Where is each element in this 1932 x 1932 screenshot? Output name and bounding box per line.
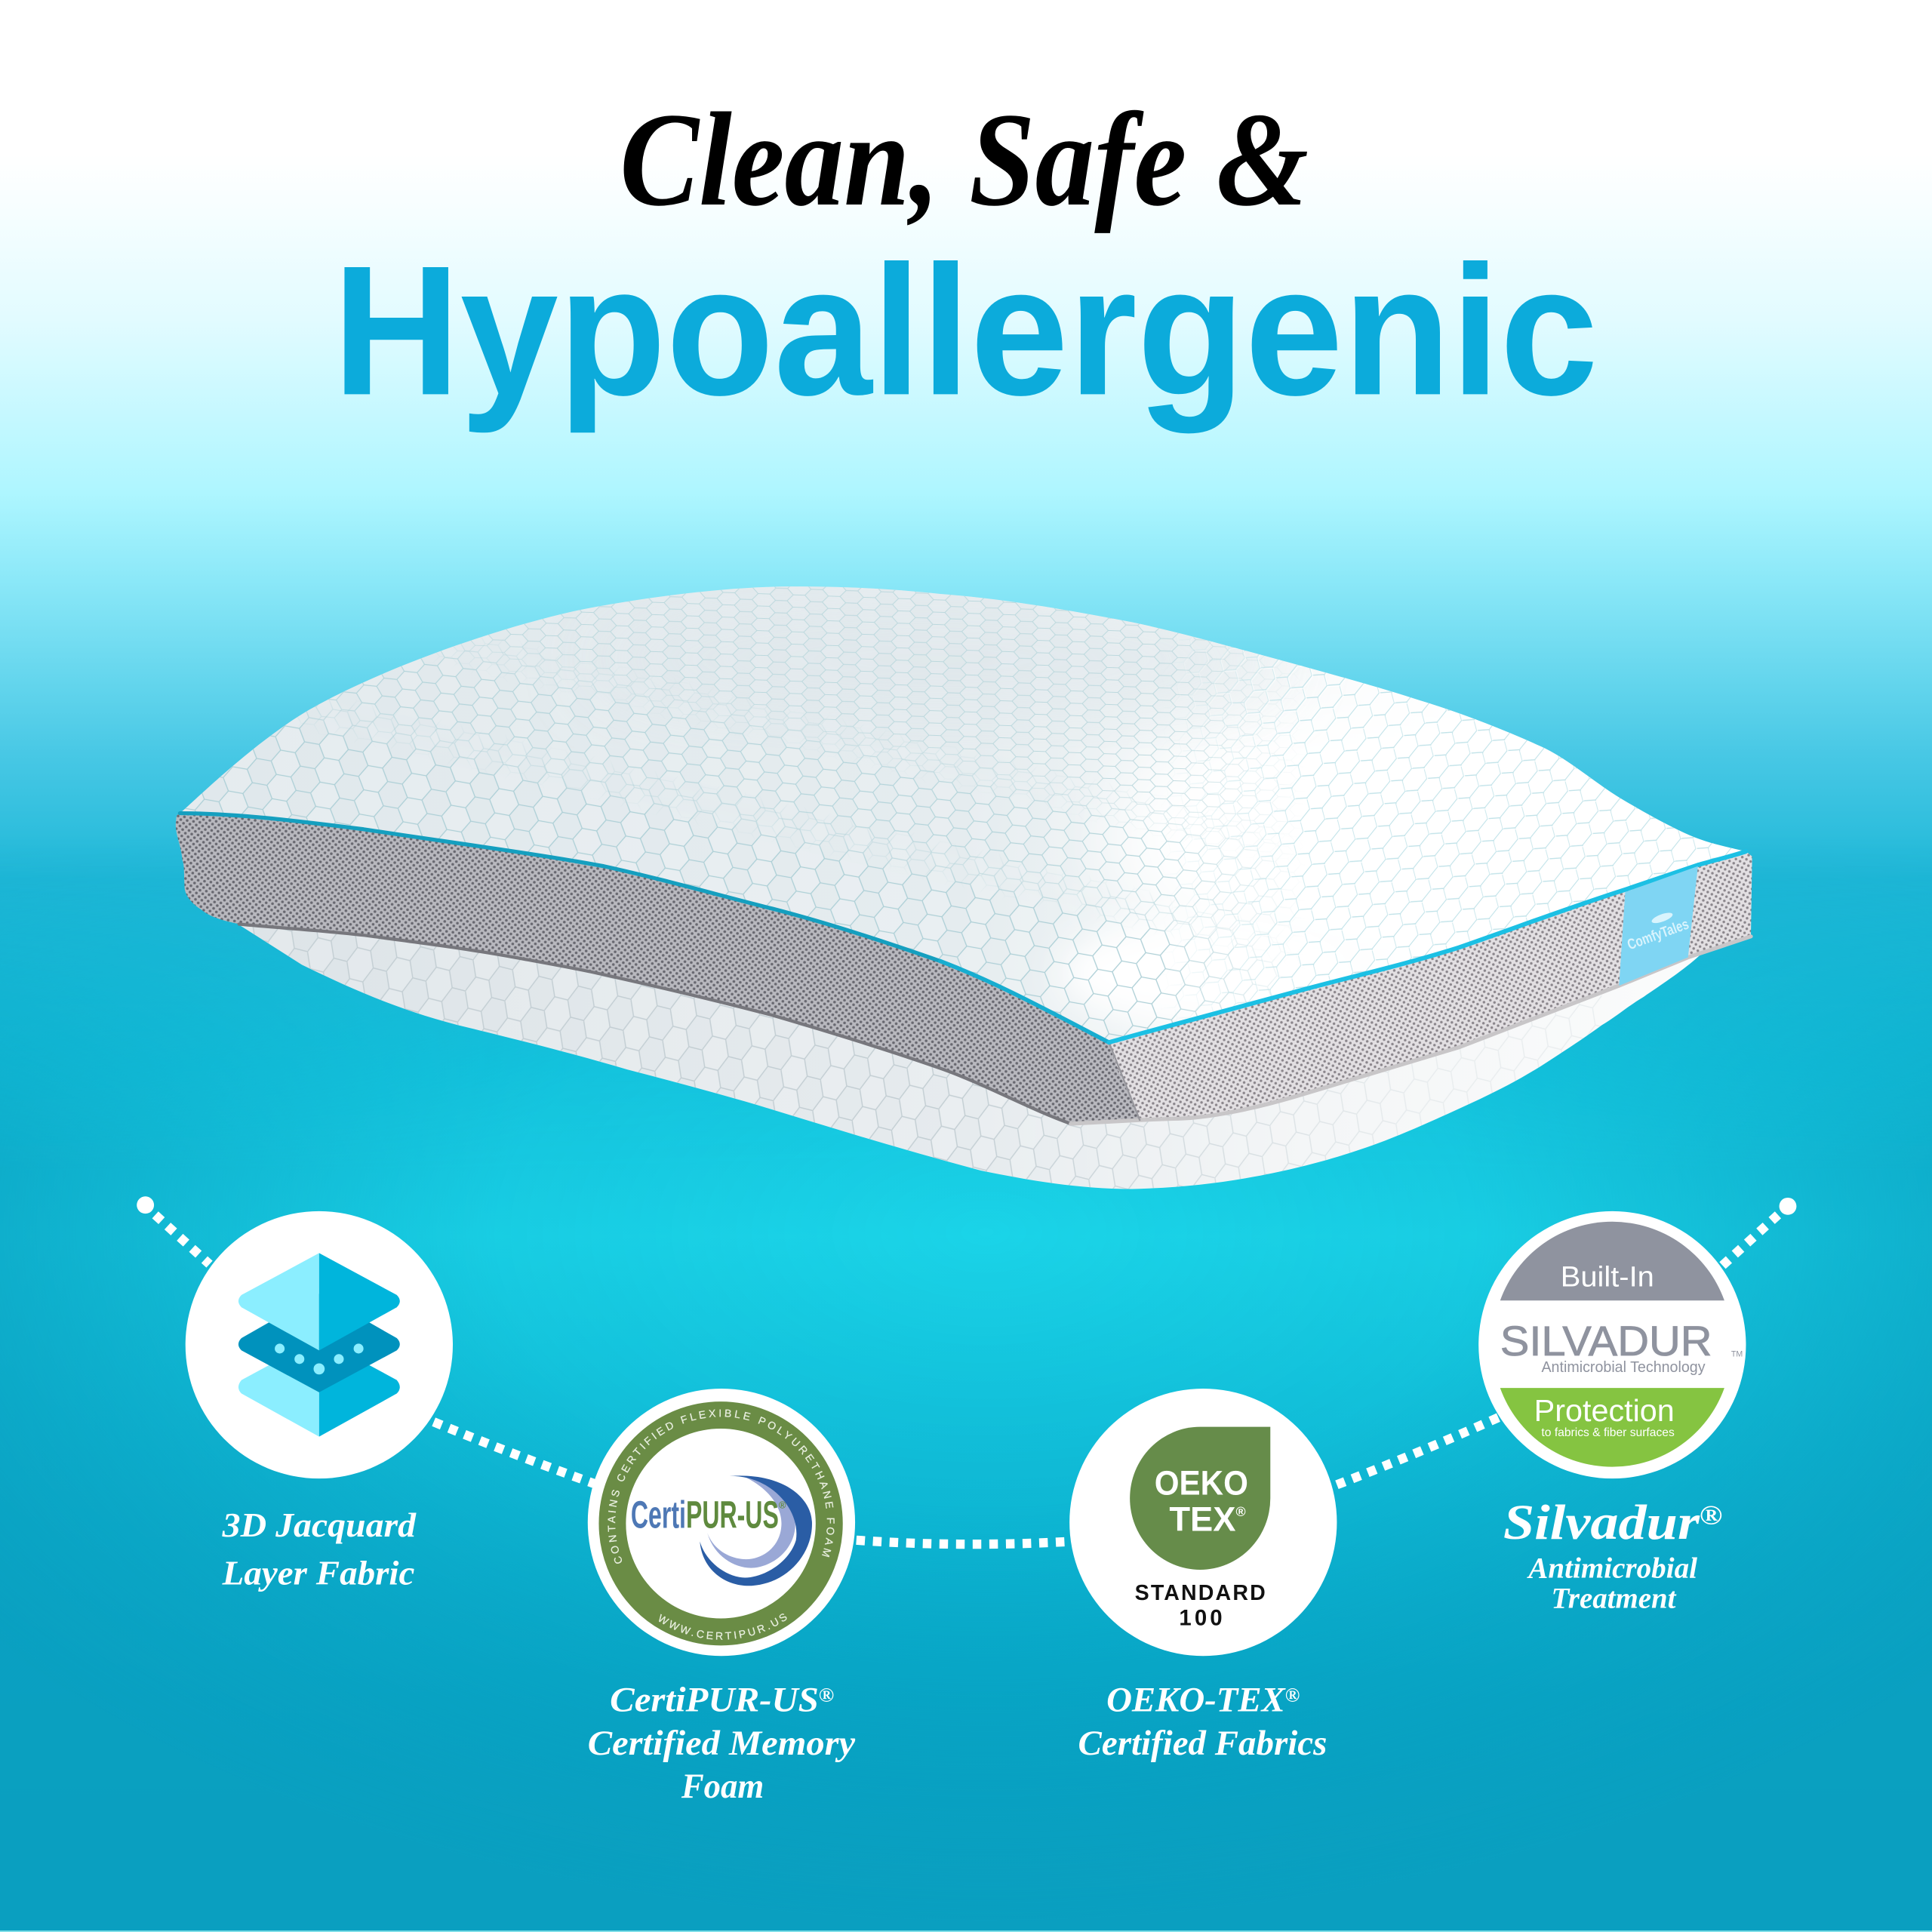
pillow lower body [237,924,1700,1189]
title: Hypoallergenic: Hypoallergenic [333,226,1598,433]
icon: layered fabric [238,1253,400,1437]
label: Silvadur Antimicrobial Treatment: ® [1700,1500,1722,1531]
connector end dot right [1780,1198,1796,1215]
label: CertiPUR-US Certified Memory Foam: Foam [681,1767,764,1806]
badge: CertiPUR-US [587,1389,856,1656]
standard 100 text [1135,1581,1266,1630]
standard 100 text: STANDARD [1135,1581,1266,1605]
Silvadur wordmarks: Built-In [1561,1260,1654,1292]
label: CertiPUR-US Certified Memory Foam: CertiPUR-US [610,1681,809,1720]
dotted connector line [155,1215,1778,1544]
blue piping [180,814,1746,1042]
Silvadur wordmarks: Antimicrobial Technology [1541,1359,1706,1376]
Silvadur wordmarks: Protection [1534,1393,1675,1428]
CertiPUR-US wordmark: CertiPUR-US [631,1493,779,1536]
OEKO TEX wordmark [1155,1463,1248,1539]
pillow brand tag [1619,866,1698,986]
green seal ring [612,1415,829,1632]
Silvadur wordmarks: to fabrics & fiber surfaces [1541,1426,1675,1439]
green leaf mark [1130,1427,1270,1570]
Silvadur wordmarks: TM [1731,1350,1743,1359]
CertiPUR-US wordmark: ® [779,1499,786,1510]
seal ring text: WWW.CERTIPUR.US [659,1614,786,1640]
badge: OEKO-TEX [1069,1389,1337,1656]
OEKO TEX wordmark: ® [1236,1504,1246,1519]
title: Clean, Safe &: Clean, Safe & [620,85,1309,234]
pillow photo illustration [123,555,1774,1189]
mesh gusset right panel [1109,851,1752,1120]
Silvadur wordmarks [1500,1260,1743,1439]
label: CertiPUR-US Certified Memory Foam: ® [819,1684,834,1706]
label: CertiPUR-US Certified Memory Foam [588,1681,855,1806]
mesh gusset left panel [176,814,1140,1124]
connector end dot left [137,1196,154,1214]
label: OEKO-TEX Certified Fabrics: OEKO-TEX [1106,1681,1284,1720]
label: Silvadur Antimicrobial Treatment: Treatment [1552,1583,1677,1615]
OEKO TEX wordmark: OEKO [1155,1463,1248,1502]
seal ring text [608,1410,835,1640]
green base [1500,1388,1724,1467]
label: 3D Jacquard Layer Fabric: 3D Jacquard [222,1506,417,1544]
label: 3D Jacquard Layer Fabric: Layer Fabric [222,1554,414,1592]
label: Silvadur Antimicrobial Treatment: Antimicrobial [1526,1552,1697,1585]
pillow brand tag: ComfyTales [1625,916,1691,953]
seal ring text: CONTAINS CERTIFIED FLEXIBLE POLYURETHANE FOAM [608,1410,835,1564]
label: OEKO-TEX Certified Fabrics: ® [1285,1684,1300,1706]
pillow top surface with honeycomb quilting [182,586,1742,1038]
label: Silvadur Antimicrobial Treatment [1503,1496,1722,1615]
badge: 3D jacquard layers [186,1211,453,1478]
label: CertiPUR-US Certified Memory Foam: Certified Memory [588,1724,855,1763]
label: OEKO-TEX Certified Fabrics [1078,1681,1327,1763]
badge: Silvadur [1478,1211,1746,1478]
logo swooshes [700,1475,812,1586]
standard 100 text: 100 [1179,1605,1223,1630]
label: Silvadur Antimicrobial Treatment: Silvadur [1503,1496,1675,1550]
OEKO TEX wordmark: TEX [1169,1500,1236,1539]
label: 3D Jacquard Layer Fabric [222,1506,417,1592]
Silvadur wordmarks: SILVADUR [1500,1318,1712,1364]
grey cap [1500,1222,1724,1300]
gusset bottom piping [239,924,1751,1124]
label: OEKO-TEX Certified Fabrics: Certified Fabrics [1078,1724,1327,1763]
